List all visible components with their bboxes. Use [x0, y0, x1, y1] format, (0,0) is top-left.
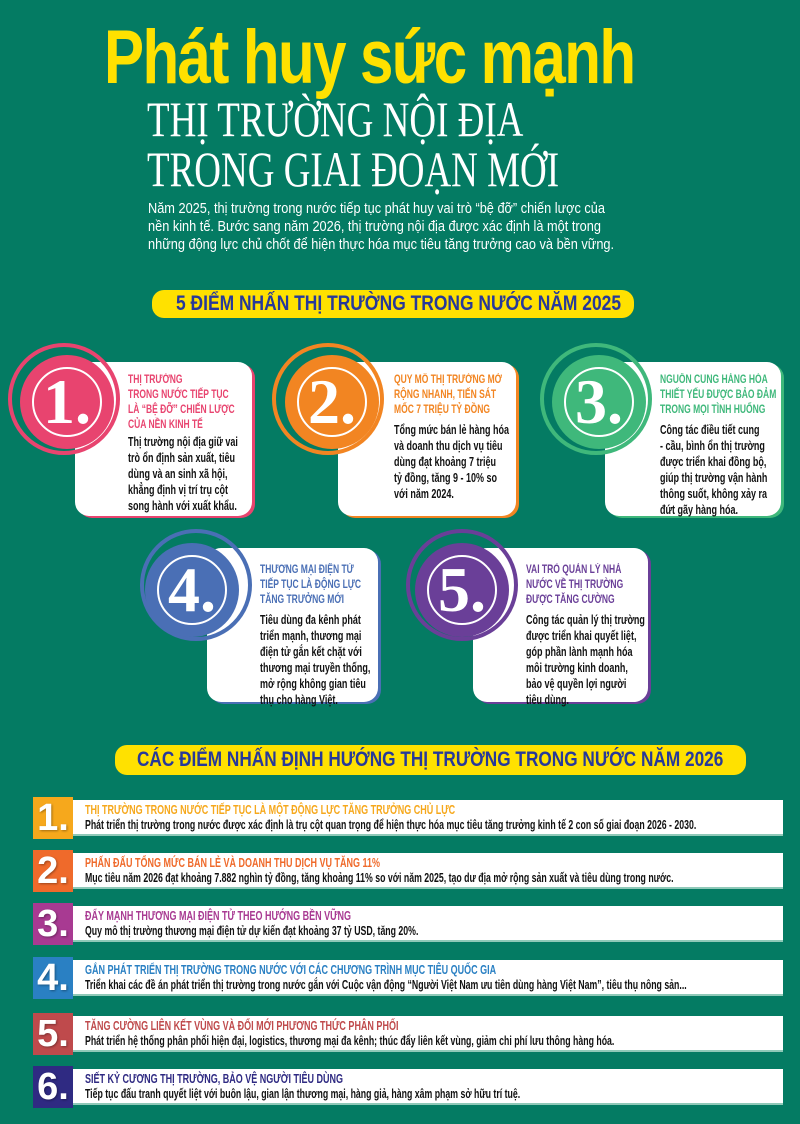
- panel: point 4: điện tử gắn kết chặt với: [260, 645, 362, 659]
- panel: point 3: đứt gãy hàng hóa.: [660, 503, 738, 517]
- panel: point 5: được triển khai quyết liệt,: [526, 629, 636, 643]
- panel: point 2: tỷ đồng, tăng 9 - 10% so: [394, 471, 497, 485]
- panel: point 2: Tổng mức bán lẻ hàng hóa: [394, 423, 509, 437]
- row 4: Triển khai các đề án phát triển thị trường trong nước gắn với Cuộc vận động “Người Việt Nam ưu tiên dùng hàng Việt Nam”, tiêu thụ nông sản...: [85, 978, 687, 992]
- row 5: TĂNG CƯỜNG LIÊN KẾT VÙNG VÀ ĐỔI MỚI PHƯƠNG THỨC PHÂN PHỐI: [85, 1019, 398, 1033]
- row 1: [33, 797, 783, 839]
- panel: point 2: 2.: [308, 366, 356, 437]
- panel: point 4: Tiêu dùng đa kênh phát: [260, 613, 361, 627]
- panel: point 4: TIẾP TỤC LÀ ĐỘNG LỰC: [260, 579, 361, 591]
- panel: point 4: TĂNG TRƯỞNG MỚI: [260, 594, 344, 606]
- panel: point 4: thụ cho hàng Việt.: [260, 693, 338, 707]
- panel: point 5: VAI TRÒ QUẢN LÝ NHÀ: [526, 564, 621, 576]
- panel: point 1: THỊ TRƯỜNG: [128, 374, 183, 386]
- panel: point 5: góp phần lành mạnh hóa: [526, 645, 633, 659]
- row 4: 4.: [37, 957, 69, 999]
- row 1: THỊ TRƯỜNG TRONG NƯỚC TIẾP TỤC LÀ MỘT ĐỘNG LỰC TĂNG TRƯỞNG CHỦ LỰC: [85, 803, 455, 817]
- row 6: [33, 1066, 783, 1108]
- panel: point 5: 5.: [438, 554, 486, 625]
- panel: point 2: với năm 2024.: [394, 487, 454, 501]
- panel: point 5: tiêu dùng.: [526, 693, 569, 707]
- row 1: Phát triển thị trường trong nước được xác định là trụ cột quan trọng để hiện thực hóa mục tiêu tăng trưởng kinh tế 2 con số giai đoạn 2026 - 2030.: [85, 818, 696, 832]
- panel: point 5: ĐƯỢC TĂNG CƯỜNG: [526, 594, 615, 606]
- row 3: ĐẨY MẠNH THƯƠNG MẠI ĐIỆN TỬ THEO HƯỚNG BỀN VỮNG: [85, 909, 351, 923]
- panel: point 3: NGUỒN CUNG HÀNG HÓA: [660, 374, 768, 386]
- panel: point 1: trò ổn định sản xuất, tiêu: [128, 451, 235, 465]
- panel: point 2: MỐC 7 TRIỆU TỶ ĐỒNG: [394, 404, 490, 416]
- row 3: [33, 903, 783, 945]
- panel: point 4: [140, 529, 381, 707]
- heading band 2026: CÁC ĐIỂM NHẤN ĐỊNH HƯỚNG THỊ TRƯỜNG TRONG NƯỚC NĂM 2026: [137, 748, 723, 771]
- panel: point 2: dùng đạt khoảng 7 triệu: [394, 455, 496, 469]
- panel: point 4: thương mại truyền thống,: [260, 661, 370, 675]
- subtitle: THỊ TRƯỜNG NỘI ĐỊA: [147, 91, 523, 147]
- panel: point 1: dùng và an sinh xã hội,: [128, 467, 228, 481]
- row 6: 6.: [37, 1066, 69, 1108]
- row 5: Phát triển hệ thống phân phối hiện đại, logistics, thương mại đa kênh; thúc đẩy liên kết vùng, giảm chi phí lưu thông hàng hóa.: [85, 1034, 614, 1048]
- panel: point 5: bảo vệ quyền lợi người: [526, 677, 626, 691]
- panel: point 2: [272, 343, 519, 518]
- row 2: [33, 850, 783, 892]
- panel: point 5: NƯỚC VỀ THỊ TRƯỜNG: [526, 579, 623, 591]
- row 6: SIẾT KỶ CƯƠNG THỊ TRƯỜNG, BẢO VỆ NGƯỜI TIÊU DÙNG: [85, 1072, 343, 1086]
- row 1: 1.: [37, 797, 69, 839]
- heading band 2025: 5 ĐIỂM NHẤN THỊ TRƯỜNG TRONG NƯỚC NĂM 2025: [176, 292, 621, 315]
- panel: point 3: thông suốt, không xảy ra: [660, 487, 767, 501]
- panel: point 1: 1.: [43, 366, 91, 437]
- panel: point 2: RỘNG NHANH, TIẾN SÁT: [394, 389, 496, 401]
- panel: point 2: và doanh thu dịch vụ tiêu: [394, 439, 503, 453]
- title: Phát huy sức mạnh: [104, 15, 634, 100]
- panel: point 4: 4.: [168, 554, 216, 625]
- row 2: PHẤN ĐẤU TỔNG MỨC BÁN LẺ VÀ DOANH THU DỊCH VỤ TĂNG 11%: [85, 856, 380, 870]
- panel: point 1: khẳng định vị trí trụ cột: [128, 483, 228, 497]
- intro paragraph: Năm 2025, thị trường trong nước tiếp tục phát huy vai trò “bệ đỡ” chiến lược của: [148, 201, 605, 217]
- intro paragraph: những động lực chủ chốt để hiện thực hóa mục tiêu tăng trưởng cao và bền vững.: [148, 237, 614, 253]
- row 5: 5.: [37, 1013, 69, 1055]
- panel: point 5: [406, 529, 651, 707]
- intro paragraph: nền kinh tế. Bước sang năm 2026, thị trường nội địa được xác định là một trong: [148, 219, 601, 235]
- panel: point 3: 3.: [575, 366, 623, 437]
- panel: point 3: TRONG MỌI TÌNH HUỐNG: [660, 404, 765, 416]
- panel: point 1: [8, 343, 255, 518]
- panel: point 3: được triển khai đồng bộ,: [660, 455, 766, 469]
- subtitle: TRONG GIAI ĐOẠN MỚI: [147, 141, 559, 197]
- row 2: Mục tiêu năm 2026 đạt khoảng 7.882 nghìn tỷ đồng, tăng khoảng 11% so với năm 2025, tạo dư địa mở rộng sản xuất và tiêu dùng trong nước.: [85, 871, 674, 885]
- panel: point 1: TRONG NƯỚC TIẾP TỤC: [128, 389, 229, 401]
- row 4: [33, 957, 783, 999]
- panel: point 5: môi trường kinh doanh,: [526, 661, 628, 675]
- row 4: GẮN PHÁT TRIỂN THỊ TRƯỜNG TRONG NƯỚC VỚI CÁC CHƯƠNG TRÌNH MỤC TIÊU QUỐC GIA: [85, 963, 496, 977]
- panel: point 1: LÀ “BỆ ĐỠ” CHIẾN LƯỢC: [128, 404, 235, 416]
- row 2: 2.: [37, 850, 69, 892]
- panel: point 3: giúp thị trường vận hành: [660, 471, 767, 485]
- panel: point 1: song hành với xuất khẩu.: [128, 499, 237, 513]
- panel: point 2: QUY MÔ THỊ TRƯỜNG MỞ: [394, 374, 502, 386]
- panel: point 4: triển mạnh, thương mại: [260, 629, 361, 643]
- panel: point 1: Thị trường nội địa giữ vai: [128, 435, 238, 449]
- row 3: Quy mô thị trường thương mại điện tử dự kiến đạt khoảng 37 tỷ USD, tăng 20%.: [85, 924, 418, 938]
- row 6: Tiếp tục đấu tranh quyết liệt với buôn lậu, gian lận thương mại, hàng giả, hàng xâm phạm sở hữu trí tuệ.: [85, 1087, 520, 1101]
- intro paragraph: [148, 201, 614, 253]
- panel: point 3: THIẾT YẾU ĐƯỢC BẢO ĐẢM: [660, 389, 776, 401]
- panel: point 3: Công tác điều tiết cung: [660, 423, 760, 437]
- row 5: [33, 1013, 783, 1055]
- subtitle: [147, 91, 559, 197]
- panel: point 1: CỦA NỀN KINH TẾ: [128, 419, 203, 431]
- panel: point 5: Công tác quản lý thị trường: [526, 613, 645, 627]
- panel: point 4: mở rộng không gian tiêu: [260, 677, 366, 691]
- panel: point 3: [540, 343, 784, 518]
- row 3: 3.: [37, 903, 69, 945]
- panel: point 4: THƯƠNG MẠI ĐIỆN TỬ: [260, 564, 354, 576]
- panel: point 3: - cầu, bình ổn thị trường: [660, 439, 765, 453]
